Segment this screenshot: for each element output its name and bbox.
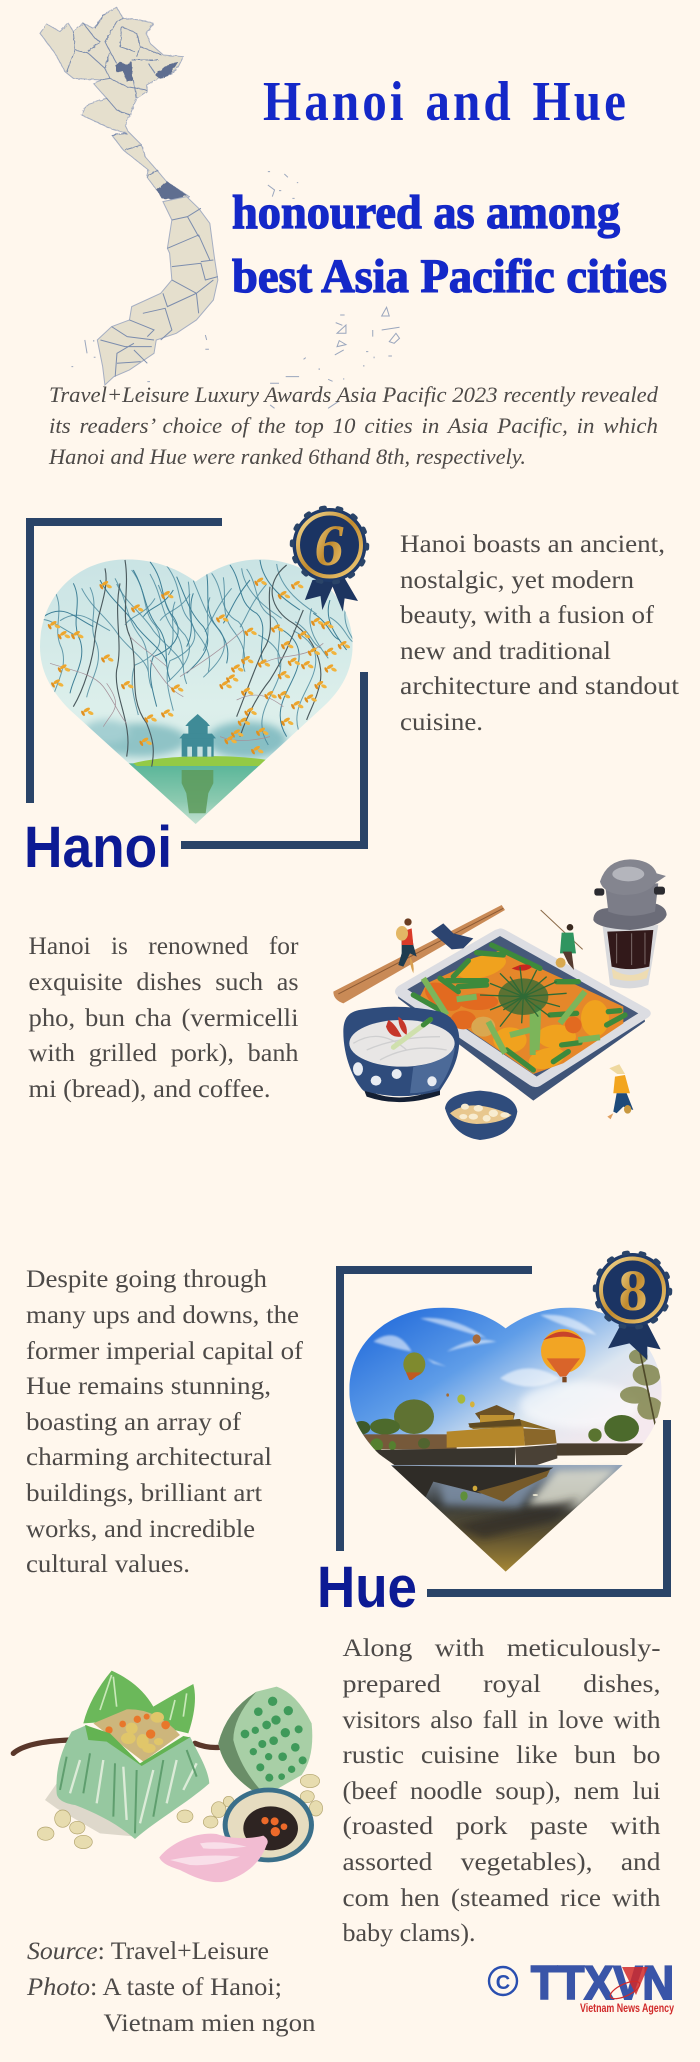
text: Hanoi dishes: pho, bun cha (vermicelli — [28, 1003, 298, 1032]
badge: rank 8 — [595, 1252, 670, 1360]
text: Hue history: cultural values. — [26, 1549, 190, 1578]
moat walls — [375, 1448, 515, 1465]
badge: rank 6: 6 — [314, 513, 344, 578]
herb — [498, 978, 548, 1015]
text: Hue dishes: assorted vegetables), and — [342, 1847, 661, 1876]
Hue name: Hue — [317, 1555, 417, 1620]
source credits: Source: Travel+Leisure — [27, 1936, 269, 1965]
text: Hue history: buildings, brilliant art — [26, 1478, 262, 1507]
intro text — [48, 382, 659, 469]
text: Hue dishes: visitors also fall in love with — [342, 1705, 661, 1734]
intro text: Hanoi and Hue were ranked 6thand 8th, respectively. — [48, 444, 526, 469]
text: Hanoi dishes: with grilled pork), banh — [28, 1038, 299, 1067]
text: Hanoi boasts: new and traditional — [400, 636, 611, 665]
islands — [71, 172, 400, 408]
shadow — [45, 1783, 137, 1837]
text: Hue history: Despite going through — [26, 1264, 267, 1293]
text: Hue history: charming architectural — [26, 1442, 272, 1471]
subtitle: honoured as among — [232, 186, 620, 239]
copyright mark: C — [496, 1972, 510, 1994]
pink petal — [159, 1834, 268, 1882]
logo: TTXVN — [489, 1956, 674, 2015]
title: Hanoi and Hue — [263, 71, 629, 133]
text: Hue dishes — [342, 1633, 661, 1947]
copyright mark — [489, 1967, 517, 1995]
subtitle: best Asia Pacific cities — [232, 250, 667, 303]
tray — [395, 928, 651, 1101]
panel: Hue — [317, 1252, 671, 1620]
southern Vietnam — [97, 197, 218, 385]
Hanoi name: Hanoi — [24, 815, 172, 880]
panel: Hanoi — [24, 508, 368, 880]
text: Hanoi boasts — [400, 529, 679, 736]
figure: man with rod — [541, 910, 583, 970]
text: Hue dishes: (beef noodle soup), nem lui — [342, 1776, 660, 1805]
palace — [360, 1434, 457, 1449]
sauce bowl — [223, 1788, 314, 1862]
text: Hue history: boasting an array of — [26, 1407, 242, 1436]
text: Hanoi boasts: nostalgic, yet modern — [400, 565, 634, 594]
logo: TTXVN: TTXVN — [531, 1956, 674, 2009]
petal highlight — [170, 1842, 247, 1865]
map of Vietnam — [40, 7, 400, 408]
intro text: Travel+Leisure Luxury Awards Asia Pacific 2023 recently revealed — [49, 382, 659, 407]
coffee phin — [593, 859, 667, 988]
text: Hue dishes: baby clams). — [342, 1918, 476, 1947]
chopsticks — [333, 905, 505, 1003]
seeds — [37, 1774, 323, 1849]
text: Hue history: Hue remains stunning, — [26, 1371, 271, 1400]
text: Hanoi dishes: exquisite dishes such as — [28, 967, 298, 996]
badge: rank 8: 8 — [618, 1258, 648, 1323]
text: Hue dishes: com hen (steamed rice with — [342, 1883, 661, 1912]
branches — [43, 560, 347, 737]
tray handle — [431, 923, 473, 949]
text: Hanoi boasts: Hanoi boasts an ancient, — [400, 529, 665, 558]
peanut bowl — [445, 1091, 517, 1140]
figure: woman — [607, 1064, 633, 1119]
balloons — [541, 1329, 586, 1382]
text: Hue dishes: (roasted pork paste with — [342, 1811, 661, 1840]
Hanoi frame — [26, 518, 368, 849]
text: Hue dishes: rustic cuisine like bun bo — [342, 1740, 660, 1769]
subtitle — [232, 186, 667, 303]
text: Hue history: works, and incredible — [26, 1514, 255, 1543]
badge: rank 6 — [292, 508, 367, 612]
illustration: Hue lotus rice — [13, 1671, 323, 1882]
source credits: Vietnam mien ngon — [104, 2008, 316, 2037]
Hue heart photo — [347, 1305, 667, 1575]
source credits: Photo: A taste of Hanoi; — [26, 1972, 282, 2001]
pagoda tower — [179, 714, 216, 757]
trees — [394, 1399, 434, 1434]
text: Hanoi dishes: mi (bread), and coffee. — [28, 1074, 270, 1103]
text: Hue history — [26, 1264, 304, 1578]
text: Hue dishes: prepared royal dishes, — [342, 1669, 660, 1698]
rice noodle bowl — [343, 1007, 459, 1102]
intro text: its readers’ choice of the top 10 cities in Asia Pacific, in which — [49, 413, 658, 438]
text: Hanoi boasts: cuisine. — [400, 707, 483, 736]
text: Hanoi dishes — [28, 931, 299, 1103]
yellow leaves — [47, 577, 351, 755]
text: Hanoi boasts: beauty, with a fusion of — [400, 600, 655, 629]
Hanoi heart photo — [25, 557, 363, 827]
Hue frame — [336, 1266, 671, 1597]
figure: man with hat — [396, 918, 417, 973]
text: Hue dishes: Along with meticulously- — [342, 1633, 660, 1662]
text: Hanoi boasts: architecture and standout — [400, 671, 679, 700]
source credits — [26, 1936, 316, 2037]
text: Hanoi dishes: Hanoi is renowned for — [28, 931, 299, 960]
northern Vietnam — [40, 7, 189, 200]
text: Hue history: former imperial capital of — [26, 1336, 304, 1365]
lotus pod — [218, 1687, 312, 1790]
illustration: Hanoi food — [333, 859, 667, 1140]
text: Hue history: many ups and downs, the — [26, 1300, 299, 1329]
stem — [13, 1740, 220, 1753]
lotus leaf parcel — [56, 1671, 209, 1839]
